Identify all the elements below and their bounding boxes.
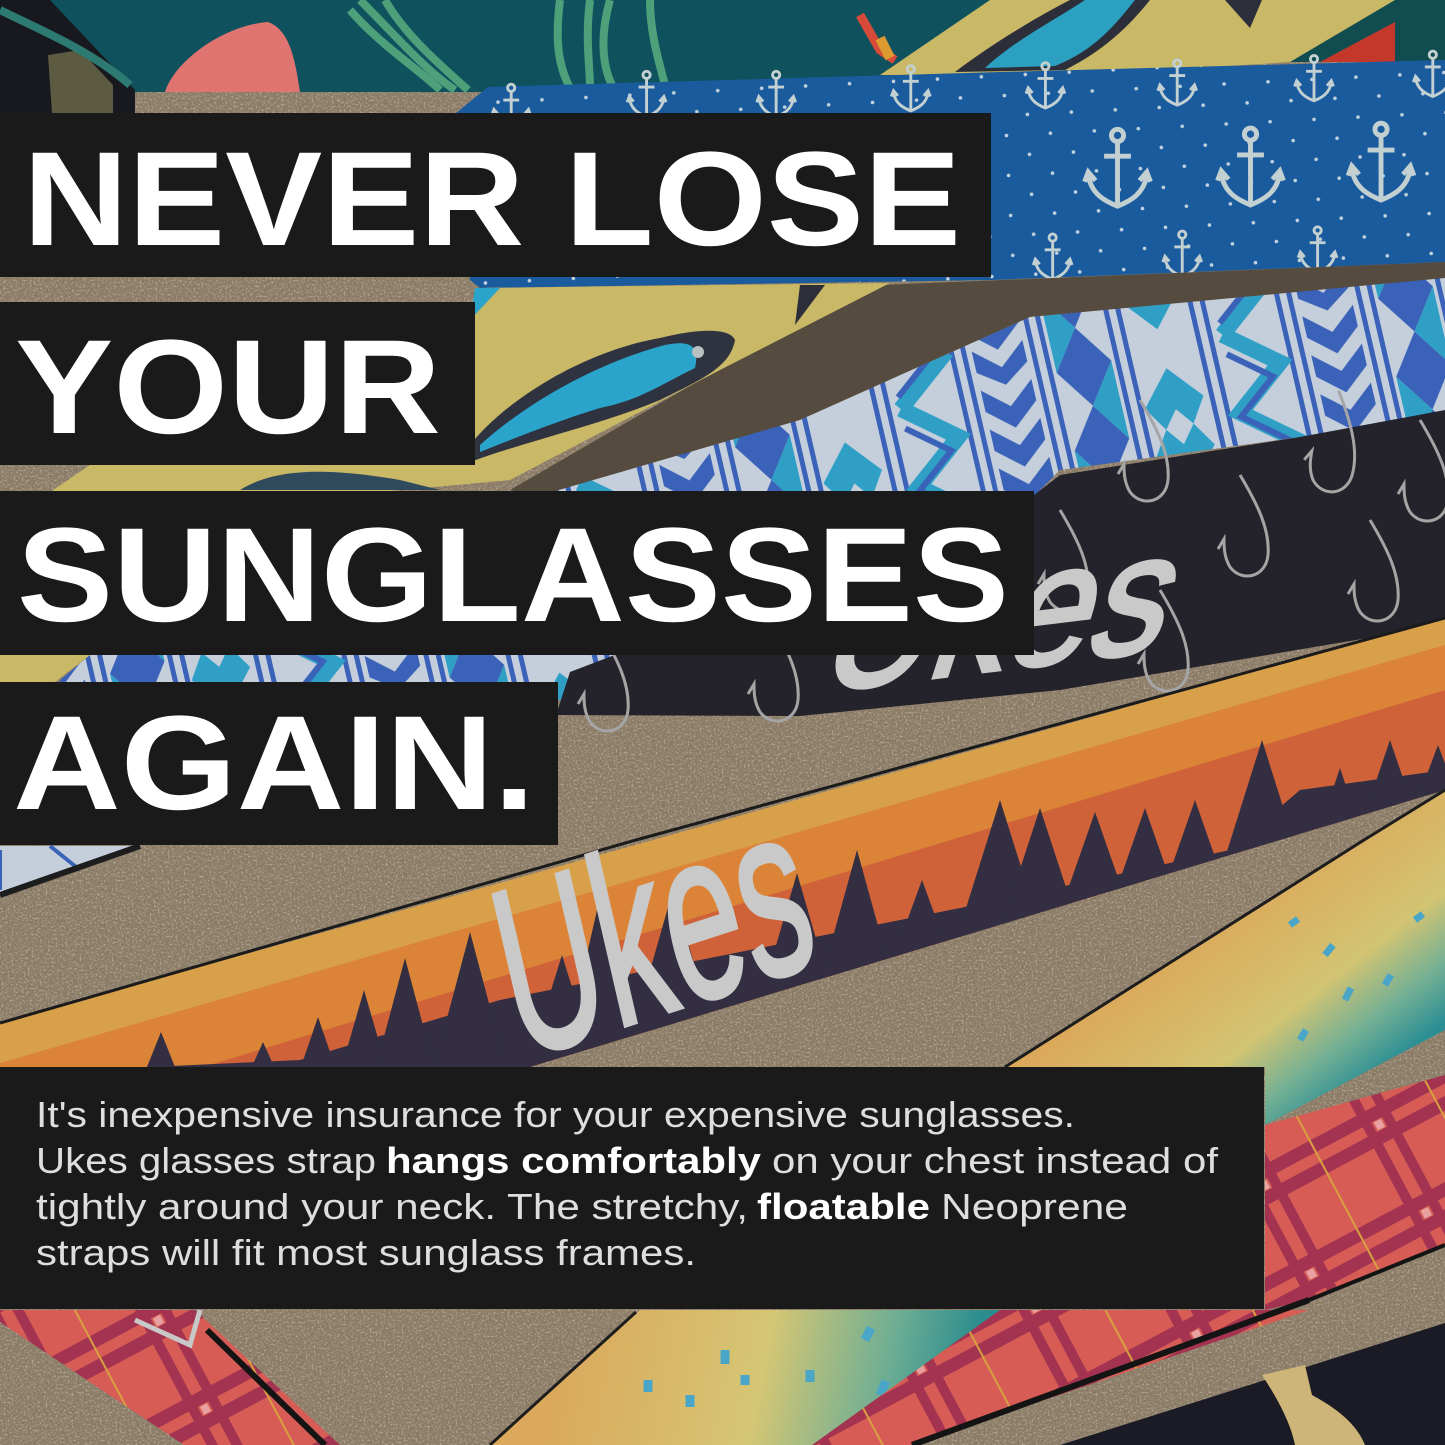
- strap: yellow with fish, top: [880, 0, 1395, 75]
- strap: plaid, bottom right: [812, 1245, 1445, 1445]
- paragraph line 2: on your chest instead of: [772, 1140, 1219, 1181]
- paragraph line 3: [36, 1186, 1128, 1227]
- anchors, top row: [492, 51, 1445, 130]
- paragraph line 3: Neoprene: [941, 1186, 1128, 1227]
- headline: line 4: AGAIN.: [13, 689, 535, 838]
- strap: black pineapple: [1060, 1323, 1445, 1445]
- strap: yellow-teal, right: [1005, 790, 1445, 1125]
- left yellow scrap: [0, 655, 90, 682]
- hooks: [578, 387, 1445, 731]
- strap: plaid, right: [1265, 1075, 1445, 1310]
- paragraph line 2: Ukes glasses strap: [36, 1140, 376, 1181]
- paragraph line 3: floatable: [757, 1186, 930, 1227]
- strap: aztec pattern: [0, 278, 1445, 895]
- strap: orange forest sunset: [0, 600, 1445, 1087]
- strap: yellow sardine: [50, 283, 890, 492]
- anchors, lower row: [1033, 227, 1337, 279]
- dark sand gap: [510, 262, 1445, 500]
- text panel: description: [0, 1067, 1264, 1309]
- paragraph line 3: tightly around your neck. The stretchy,: [36, 1186, 748, 1227]
- headline: line 2: YOUR: [15, 313, 441, 462]
- paragraph line 4: straps will fit most sunglass frames.: [36, 1232, 696, 1273]
- strap: tropical print: [0, 0, 1445, 113]
- headline: line 3: SUNGLASSES: [17, 501, 1009, 650]
- logo: Ukes on hooks strap: Ukes: [803, 493, 1208, 729]
- strap: yellow-teal, bottom: [490, 1310, 1000, 1445]
- paragraph line 2: [36, 1140, 1219, 1181]
- anchors, middle row: [1085, 123, 1414, 206]
- paragraph line 1: It's inexpensive insurance for your expensive sunglasses.: [36, 1094, 1075, 1135]
- forest silhouette: [141, 740, 1445, 1087]
- strap: plaid, lower left: [0, 1310, 340, 1445]
- logo: Ukes on forest strap: Ukes: [471, 749, 834, 1110]
- strap: black with hooks: [556, 387, 1445, 731]
- headline: line 1: NEVER LOSE: [23, 125, 961, 274]
- paragraph line 2: hangs comfortably: [386, 1140, 761, 1181]
- strap: blue anchors: [456, 51, 1445, 288]
- strap edge: [0, 618, 1445, 1023]
